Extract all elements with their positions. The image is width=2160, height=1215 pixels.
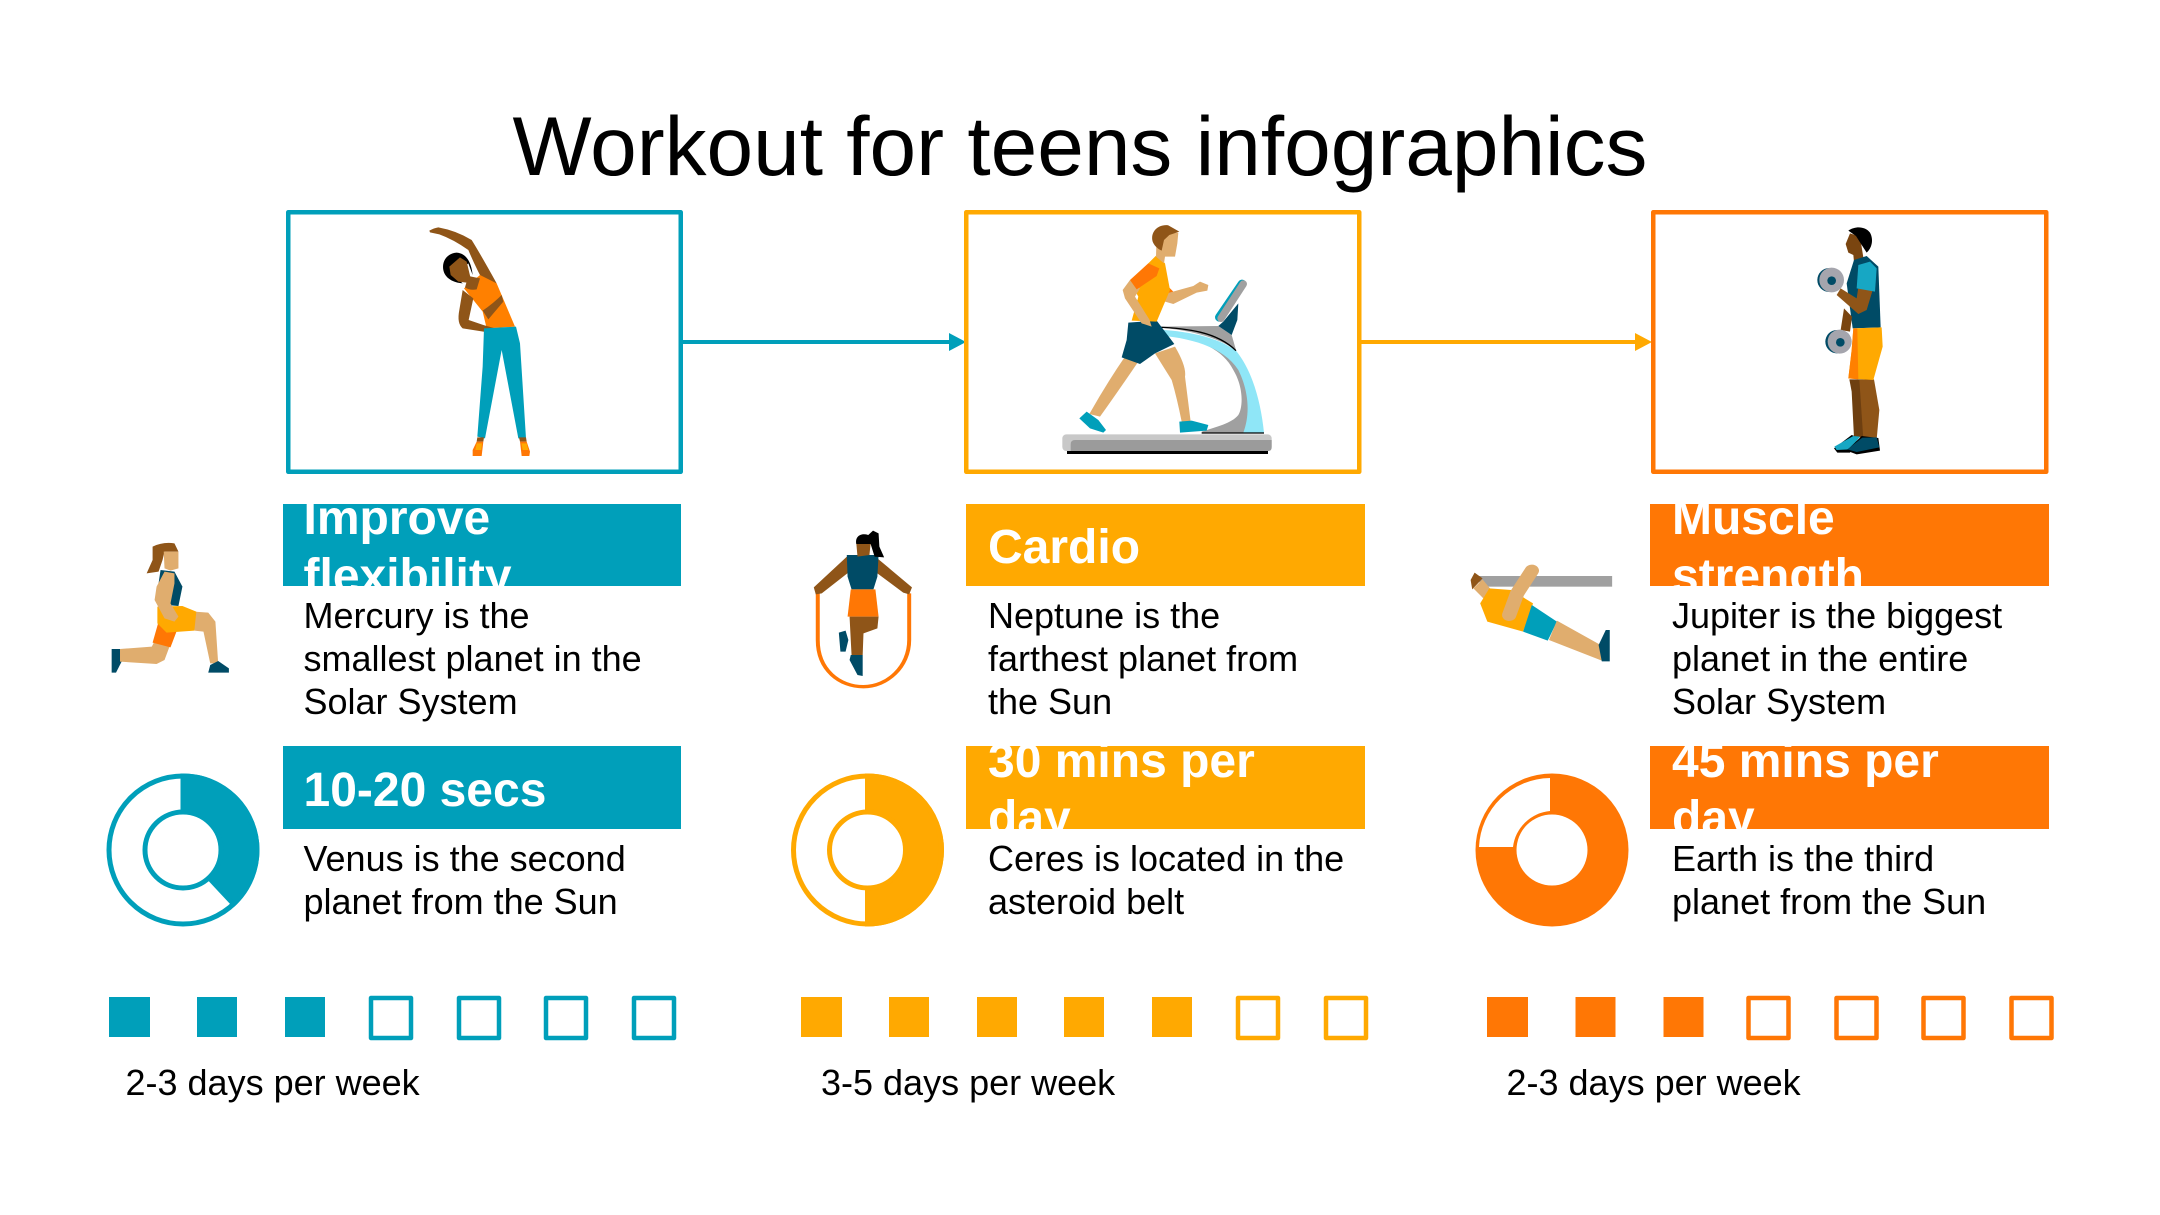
heading: muscle strength: Muscle xyxy=(1672,492,1835,545)
heading: 30 mins per day xyxy=(966,746,1365,829)
text: ceres: asteroid belt xyxy=(988,881,1184,922)
heading: cardio: Cardio xyxy=(988,521,1140,574)
heading: improve flexibility xyxy=(283,504,681,586)
icon: woman lunge xyxy=(112,543,229,673)
label: 2-3 days per week: 2-3 days per week xyxy=(126,1062,421,1103)
chart: donut 30 mins xyxy=(794,776,942,924)
panel: muscle strength column xyxy=(1471,492,2052,1103)
icon: man on pull-up bar xyxy=(1471,571,1612,661)
icon: woman side stretch xyxy=(429,227,530,456)
text: jupiter: Solar System xyxy=(1672,681,1886,722)
chart: donut 45 mins xyxy=(1476,774,1628,926)
text: venus: Venus is the second xyxy=(304,838,626,879)
heading: 10-20 secs xyxy=(283,746,681,829)
text: neptune: the Sun xyxy=(988,681,1112,722)
chart: donut 10-20 secs xyxy=(109,776,257,924)
label: 3-5 days per week: 3-5 days per week xyxy=(821,1062,1116,1103)
heading: 30 mins per day: 30 mins per xyxy=(988,735,1255,788)
text: earth: Earth is the third xyxy=(1672,838,1934,879)
label: 2-3 days per week: 2-3 days per week xyxy=(1506,1062,1802,1103)
chart: days per week squares xyxy=(1487,997,2052,1038)
icon: woman jump rope xyxy=(814,531,912,687)
chart: days per week squares xyxy=(109,997,674,1038)
chart: days per week squares xyxy=(801,997,1366,1038)
panel: stretching woman illustration xyxy=(288,212,681,472)
text: venus: planet from the Sun xyxy=(304,881,618,922)
text: earth: planet from the Sun xyxy=(1672,881,1986,922)
title: Workout for teens infographics xyxy=(513,99,1647,193)
icon: man running on treadmill xyxy=(1062,225,1272,454)
panel: cardio column xyxy=(794,504,1366,1103)
text: jupiter: planet in the entire xyxy=(1672,638,1968,679)
heading: improve flexibility: flexibility xyxy=(304,550,512,603)
heading: 30 mins per day: day xyxy=(988,792,1071,845)
text: ceres: Ceres is located in the xyxy=(988,838,1344,879)
icon: man lifting dumbbells xyxy=(1817,227,1883,454)
text: jupiter: Jupiter is the biggest xyxy=(1672,595,2002,636)
panel: treadmill runner illustration xyxy=(966,212,1359,472)
text: mercury: smallest planet in the xyxy=(304,638,642,679)
panel: improve flexibility column xyxy=(109,492,681,1103)
arrow: flexibility to cardio xyxy=(683,333,966,351)
heading: muscle strength: strength xyxy=(1672,550,1864,603)
heading: 10-20 secs: 10-20 secs xyxy=(304,764,546,817)
heading: 45 mins per day xyxy=(1650,746,2049,829)
text: neptune: Neptune is the xyxy=(988,595,1220,636)
text: mercury: Solar System xyxy=(304,681,518,722)
heading: improve flexibility: Improve xyxy=(304,492,490,545)
heading: 45 mins per day: 45 mins per xyxy=(1672,735,1939,788)
heading: 45 mins per day: day xyxy=(1672,792,1755,845)
text: neptune: farthest planet from xyxy=(988,638,1298,679)
heading: muscle strength xyxy=(1650,504,2049,586)
arrow: cardio to muscle strength xyxy=(1361,333,1652,351)
panel: dumbbell man illustration xyxy=(1653,212,2046,472)
heading: cardio xyxy=(966,504,1365,586)
text: mercury: Mercury is the xyxy=(304,595,530,636)
